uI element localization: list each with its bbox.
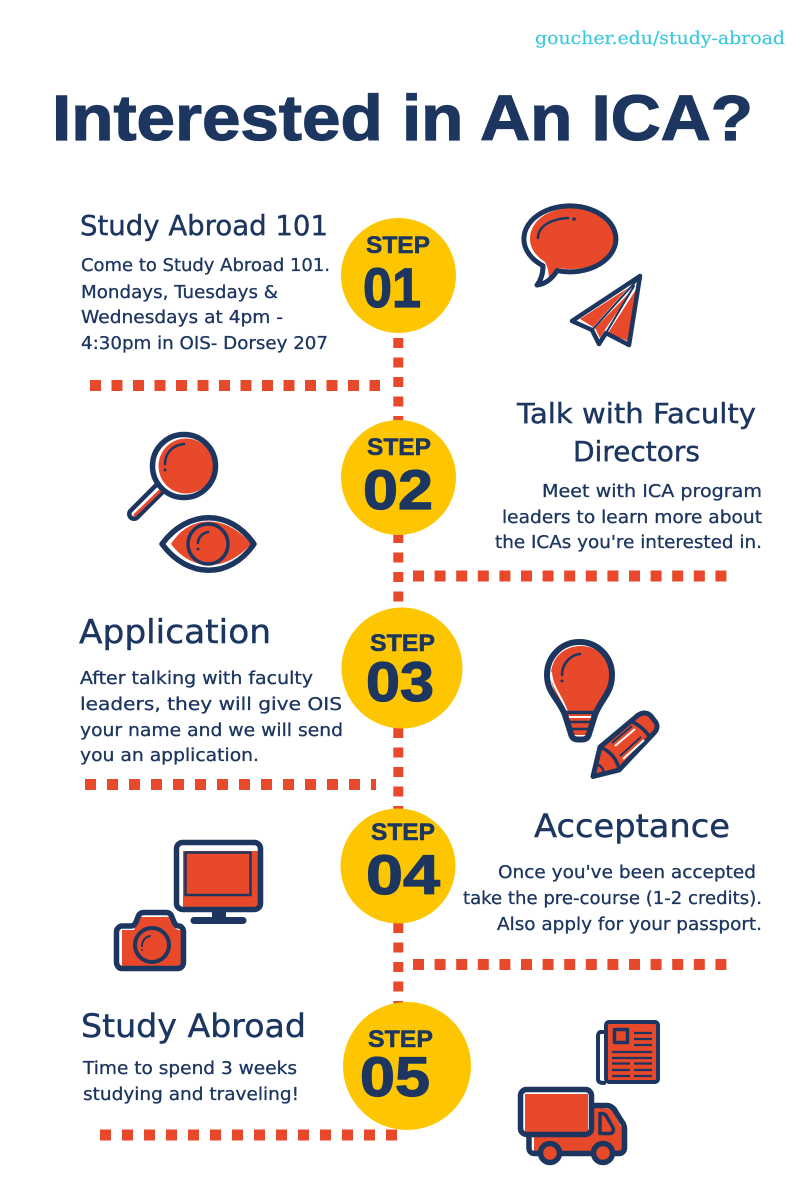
- step 1 badge: 01: [363, 256, 421, 319]
- step 3 badge: [342, 608, 462, 728]
- step 5 badge: 05: [360, 1045, 430, 1108]
- step 1 text: [80, 210, 330, 354]
- step 2 text: Meet with ICA program: [542, 481, 762, 502]
- icon: light bulb: [547, 642, 612, 740]
- step 3 text: After talking with faculty: [80, 668, 313, 689]
- dotted connector lines: [85, 338, 727, 1135]
- icon: speech bubble: [524, 206, 616, 285]
- step 2 badge: [341, 420, 456, 535]
- step 5 badge: [343, 1002, 471, 1130]
- step 3 badge: STEP: [370, 630, 435, 657]
- step 2 text: Directors: [573, 436, 700, 468]
- step 5 text: studying and traveling!: [83, 1084, 299, 1105]
- step 5 text: Time to spend 3 weeks: [82, 1058, 297, 1079]
- step 1 text: 4:30pm in OIS- Dorsey 207: [81, 333, 328, 354]
- step 1 text: Come to Study Abroad 101.: [81, 255, 330, 276]
- step 2 badge: 02: [363, 458, 433, 521]
- step 4 badge: [340, 808, 456, 924]
- icon: magnifying glass: [134, 434, 216, 515]
- icon: eye: [162, 518, 254, 570]
- step 4 badge: 04: [366, 843, 440, 906]
- website link: goucher.edu/study-abroad: [535, 28, 785, 49]
- step 4 text: Also apply for your passport.: [497, 914, 762, 935]
- icon: pencil: [593, 713, 657, 776]
- step 3 text: you an application.: [80, 745, 259, 766]
- step 2 text: the ICAs you're interested in.: [495, 532, 762, 553]
- step 5 badge: STEP: [368, 1026, 433, 1053]
- step 3 text: Application: [79, 612, 271, 651]
- step 4 text: Acceptance: [534, 807, 730, 845]
- step 4 text: [463, 807, 762, 935]
- step 2 text: Talk with Faculty: [516, 398, 756, 430]
- step 4 badge: STEP: [371, 819, 435, 846]
- step 1 text: Study Abroad 101: [80, 210, 328, 242]
- icon: paper airplane: [572, 276, 640, 345]
- step 5 text: Study Abroad: [81, 1007, 306, 1045]
- step 2 text: leaders to learn more about: [502, 507, 762, 528]
- title: Interested in An ICA?: [52, 82, 753, 154]
- icon: delivery truck: [520, 1090, 624, 1162]
- step 1 text: Mondays, Tuesdays &: [81, 282, 278, 303]
- step 1 text: Wednesdays at 4pm -: [81, 307, 283, 328]
- step 3 badge: 03: [366, 650, 434, 713]
- step 3 text: [79, 612, 343, 766]
- icon: camera: [116, 912, 184, 968]
- step 3 text: your name and we will send: [80, 720, 343, 741]
- step 1 badge: [341, 218, 456, 333]
- icon: newspaper: [598, 1022, 658, 1083]
- step 2 text: [495, 398, 762, 553]
- step 3 text: leaders, they will give OIS: [80, 694, 342, 715]
- step 5 text: [81, 1007, 306, 1105]
- step 2 badge: STEP: [367, 434, 431, 461]
- icon: monitor: [176, 842, 260, 924]
- step 4 text: take the pre-course (1-2 credits).: [463, 888, 762, 909]
- step 4 text: Once you've been accepted: [498, 862, 756, 883]
- step 1 badge: STEP: [366, 232, 430, 259]
